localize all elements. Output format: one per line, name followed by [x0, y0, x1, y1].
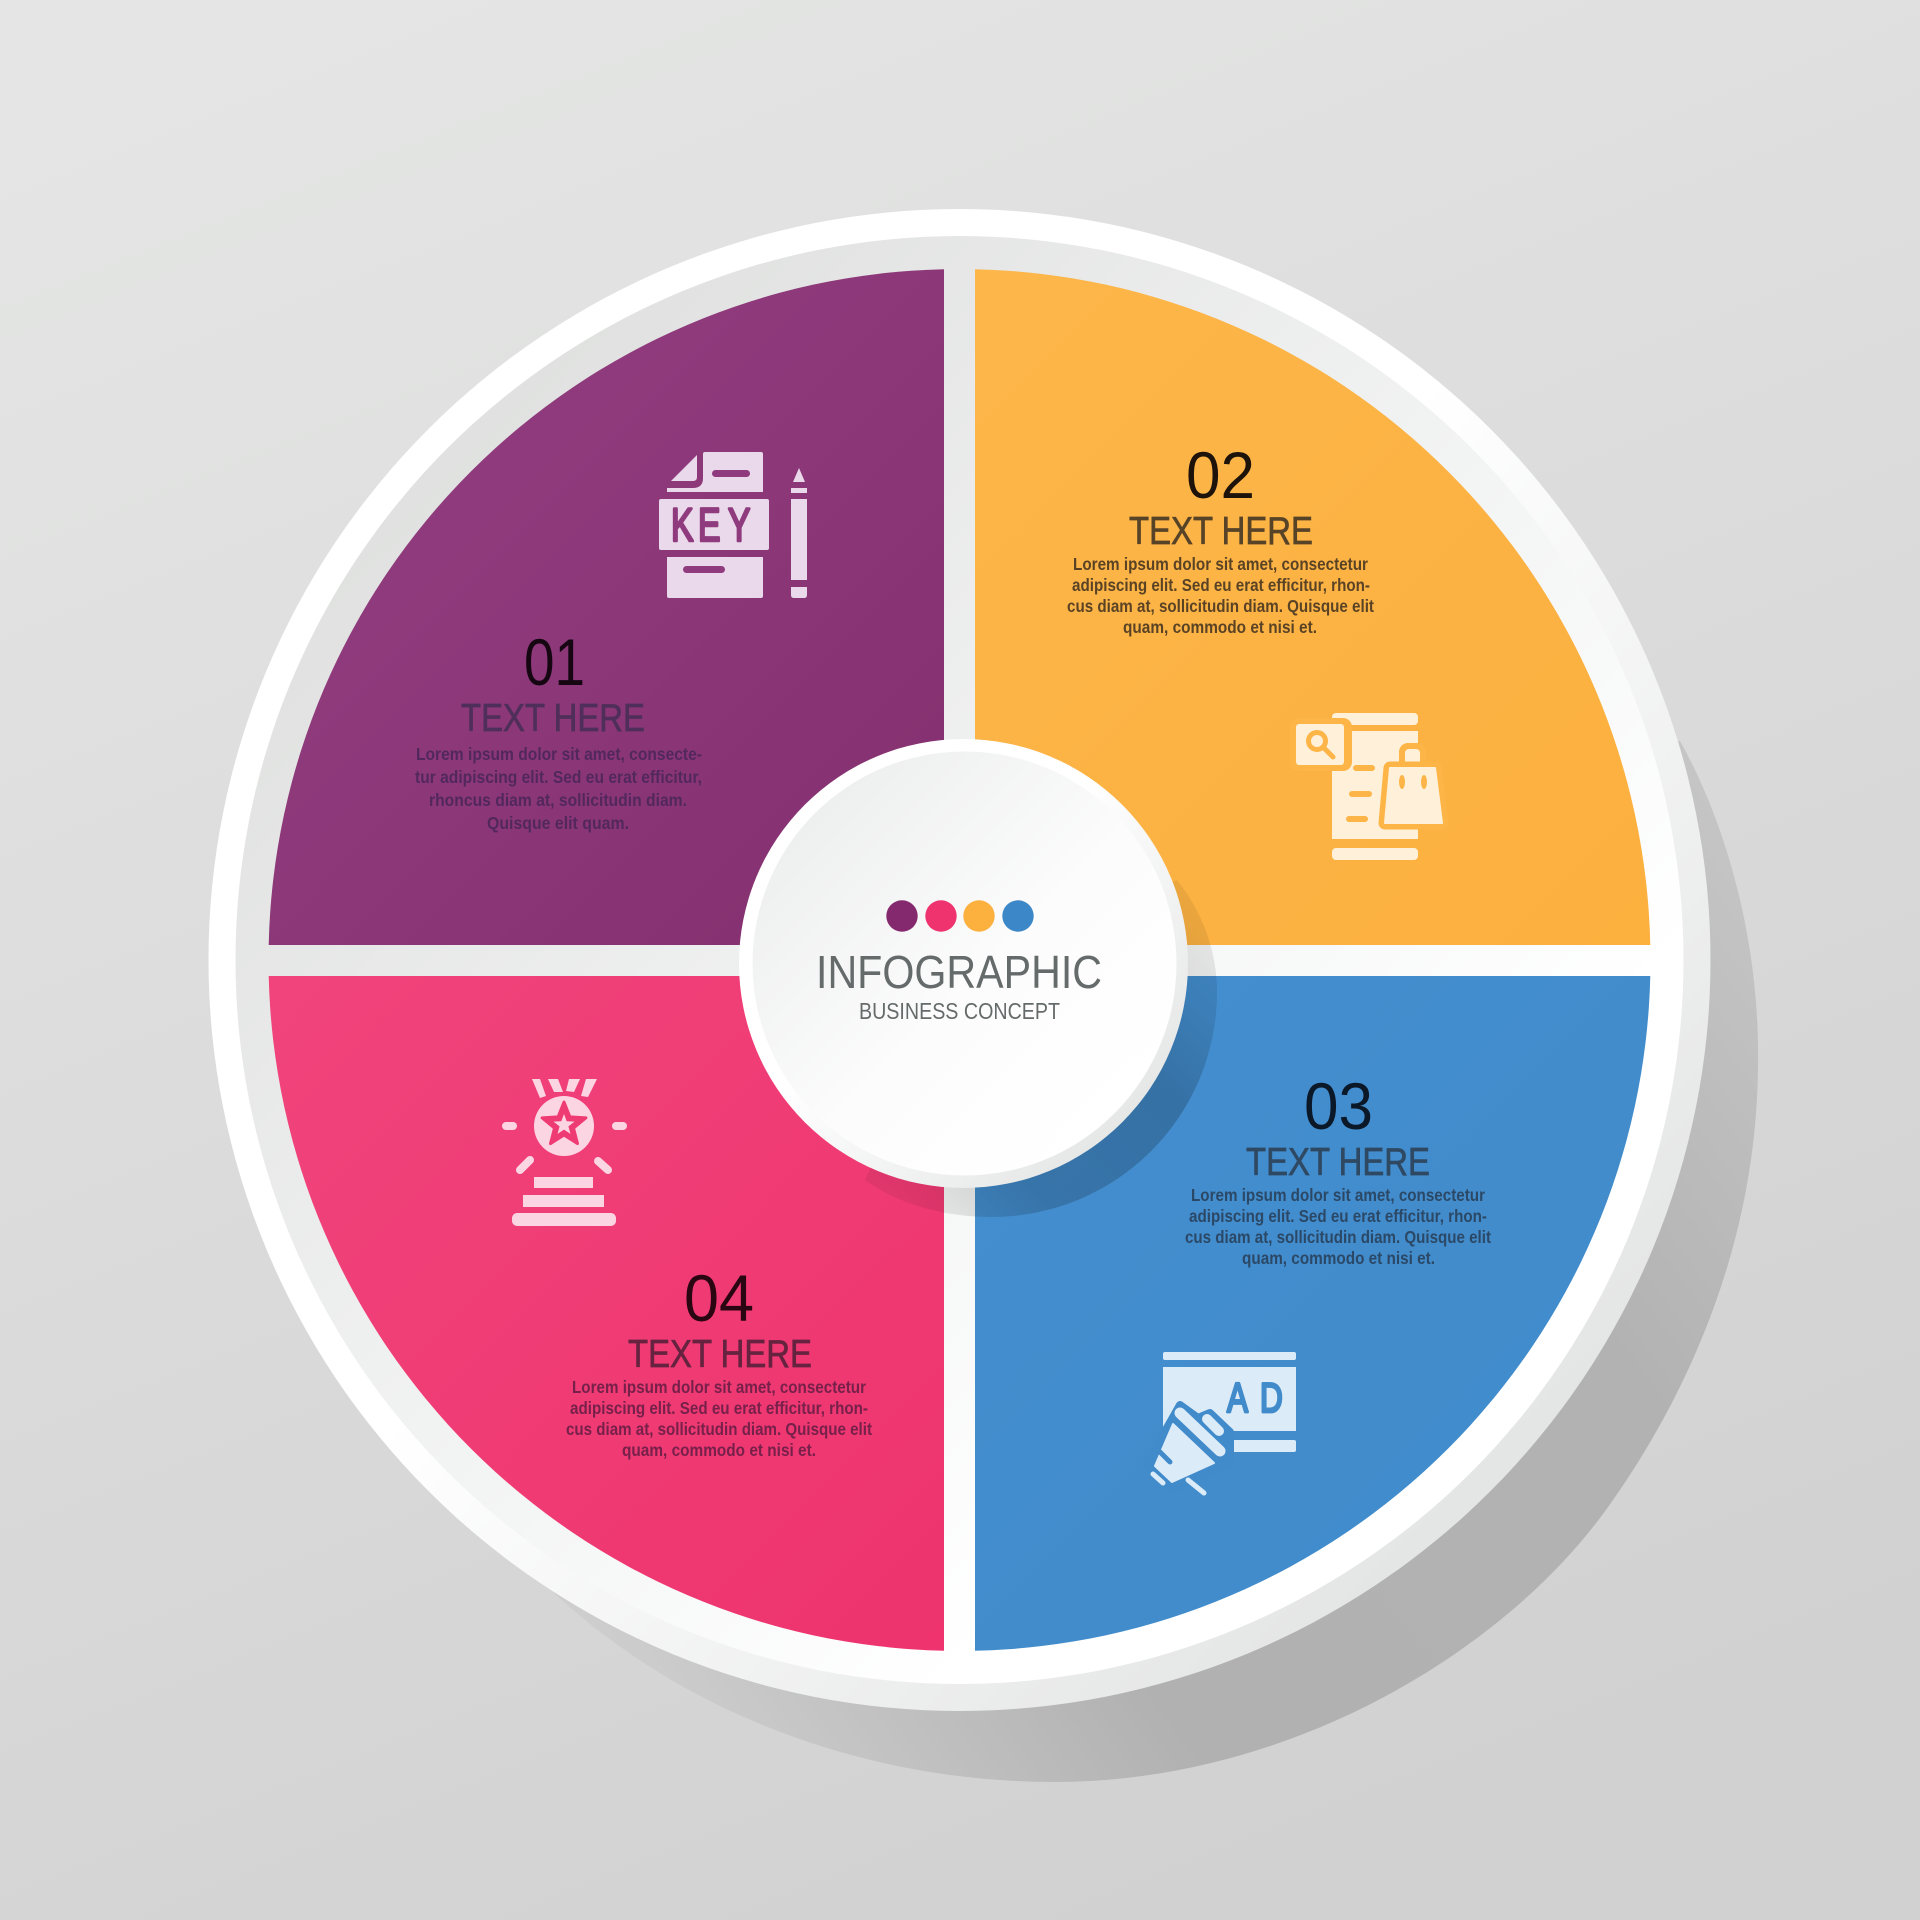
text block 01: Quisque elit quam. [487, 813, 629, 833]
center title: INFOGRAPHIC [816, 946, 1102, 998]
center circle shadow [865, 880, 1217, 1217]
text block 04: quam, commodo et nisi et. [622, 1440, 816, 1460]
panel: segment 04 pink [269, 976, 944, 1651]
icon: award medal on podium [502, 1079, 627, 1226]
text block 01: TEXT HERE [461, 697, 645, 740]
text block 03: adipiscing elit. Sed eu erat efficitur, rhon- [1189, 1206, 1487, 1226]
icon: phone, search and shopping bag [1290, 713, 1442, 860]
text block 01: Lorem ipsum dolor sit amet, consecte- [416, 744, 702, 764]
icon: advert board and megaphone: AD [1227, 1374, 1283, 1421]
text block 02 [1067, 438, 1374, 637]
panel: segment 02 orange [975, 269, 1650, 945]
text block 01: rhoncus diam at, sollicitudin diam. [429, 790, 687, 810]
text block 02: adipiscing elit. Sed eu erat efficitur, rhon- [1072, 575, 1370, 595]
outer disc [208, 209, 1710, 1711]
text block 01: 01 [524, 625, 585, 699]
text block 03: 03 [1304, 1069, 1373, 1143]
center colour dots [886, 900, 1034, 932]
text block 03: quam, commodo et nisi et. [1242, 1248, 1435, 1268]
text block 01 [415, 625, 702, 833]
panel: segment 03 blue [975, 976, 1650, 1651]
text block 04: 04 [684, 1261, 754, 1335]
icon: advert board and megaphone [1146, 1352, 1296, 1493]
text block 01: tur adipiscing elit. Sed eu erat efficitur, [415, 767, 702, 787]
disc drop shadow [554, 741, 1758, 1782]
text block 04: cus diam at, sollicitudin diam. Quisque elit [566, 1419, 872, 1439]
panel: segment 01 purple [269, 269, 944, 945]
inner disc [236, 236, 1684, 1684]
text block 04: adipiscing elit. Sed eu erat efficitur, rhon- [570, 1398, 868, 1418]
text block 03: cus diam at, sollicitudin diam. Quisque elit [1185, 1227, 1491, 1247]
text block 02: cus diam at, sollicitudin diam. Quisque elit [1067, 596, 1374, 616]
text block 02: quam, commodo et nisi et. [1123, 617, 1317, 637]
text block 04: Lorem ipsum dolor sit amet, consectetur [572, 1377, 866, 1397]
icon: key document and pencil [659, 452, 807, 598]
text block 03: TEXT HERE [1246, 1141, 1430, 1184]
center subtitle: BUSINESS CONCEPT [859, 998, 1060, 1024]
icon: key document and pencil: KEY [671, 499, 750, 551]
text block 04: TEXT HERE [628, 1333, 812, 1376]
text block 02: 02 [1186, 438, 1255, 512]
text block 04 [566, 1261, 872, 1460]
text block 02: TEXT HERE [1129, 510, 1313, 553]
center circle [739, 739, 1188, 1188]
text block 03: Lorem ipsum dolor sit amet, consectetur [1191, 1185, 1485, 1205]
text block 02: Lorem ipsum dolor sit amet, consectetur [1073, 554, 1368, 574]
text block 03 [1185, 1069, 1491, 1268]
